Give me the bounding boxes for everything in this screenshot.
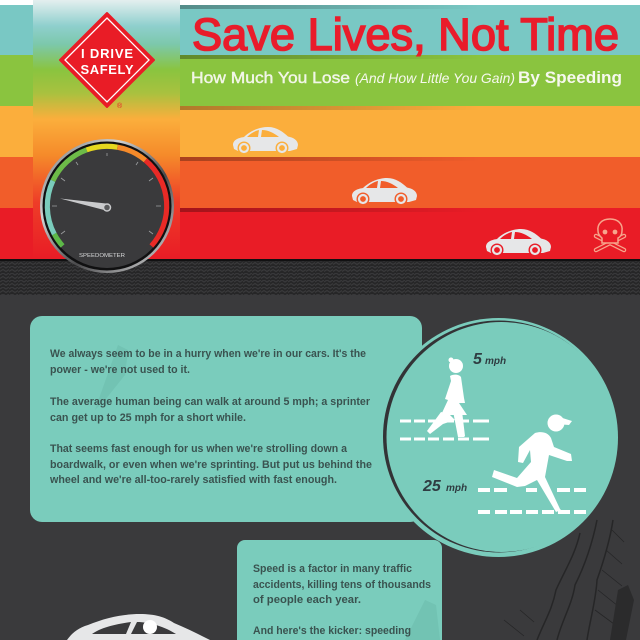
subtitle: How Much You Lose <box>191 70 350 87</box>
panel: speed factor text: accidents, killing tens of thousands <box>253 579 431 591</box>
5 mph label: mph <box>485 356 506 367</box>
panel: speed factor text: And here's the kicker: speeding <box>253 625 411 637</box>
tire tread band <box>0 259 640 295</box>
intro paragraphs: power - we're not used to it. <box>50 364 190 376</box>
logo: I Drive Safely diamond: I DRIVE <box>81 46 133 61</box>
car on orange band <box>233 127 298 154</box>
logo: I Drive Safely diamond: ® <box>117 102 123 110</box>
panel: speed factor text <box>237 540 442 640</box>
panel: intro text <box>30 316 422 522</box>
gradient logo column <box>33 0 180 259</box>
logo: I Drive Safely diamond: SAFELY <box>80 62 134 77</box>
intro paragraphs: can get up to 25 mph for a short while. <box>50 412 246 424</box>
large car with driver at bottom <box>67 614 210 640</box>
subtitle: By Speeding <box>518 68 622 87</box>
crosswalk dashes, runner <box>478 488 586 514</box>
top white strip <box>0 0 640 5</box>
subtitle <box>191 68 622 87</box>
title: Save Lives, Not Time <box>192 9 619 60</box>
intro paragraphs: wheel and we're all-too-rarely satisfied with fast enough. <box>49 474 337 486</box>
logo: I Drive Safely diamond <box>60 13 154 110</box>
25 mph label <box>422 478 467 495</box>
colored speed bands <box>0 5 640 259</box>
icon: walking woman <box>427 358 467 437</box>
panel: speed factor text: of people each year. <box>253 594 361 606</box>
gauge needle <box>60 198 108 211</box>
intro paragraphs: We always seem to be in a hurry when we're in our cars. It's the <box>50 348 366 360</box>
panel: speed factor text: Speed is a factor in many traffic <box>253 563 412 575</box>
faint tire track on panel <box>95 345 128 410</box>
intro paragraphs: The average human being can walk at around 5 mph; a sprinter <box>50 396 371 408</box>
car on dark orange band <box>352 178 417 206</box>
gauge label: SPEEDOMETER <box>79 253 125 259</box>
gauge ticks <box>52 153 161 234</box>
5 mph label <box>473 351 506 368</box>
5 mph label: 5 <box>473 351 483 368</box>
crosswalk dashes, walker <box>400 420 489 440</box>
tire tracks decoration <box>504 520 634 640</box>
gauge color arc <box>47 146 167 246</box>
car on red band <box>486 229 551 256</box>
intro paragraphs <box>49 348 372 486</box>
icon: skull and crossbones <box>596 219 624 250</box>
driver head <box>143 620 157 634</box>
intro paragraphs: That seems fast enough for us when we're strolling down a <box>50 443 348 455</box>
subtitle: (And How Little You Gain) <box>355 70 515 86</box>
intro paragraphs: boardwalk, or even when we're sprinting. But put us behind the <box>50 459 372 471</box>
icon: running man <box>492 414 572 512</box>
speedometer <box>40 139 174 273</box>
panel: walker and runner circle <box>379 318 618 557</box>
25 mph label: mph <box>446 483 467 494</box>
25 mph label: 25 <box>422 478 442 495</box>
